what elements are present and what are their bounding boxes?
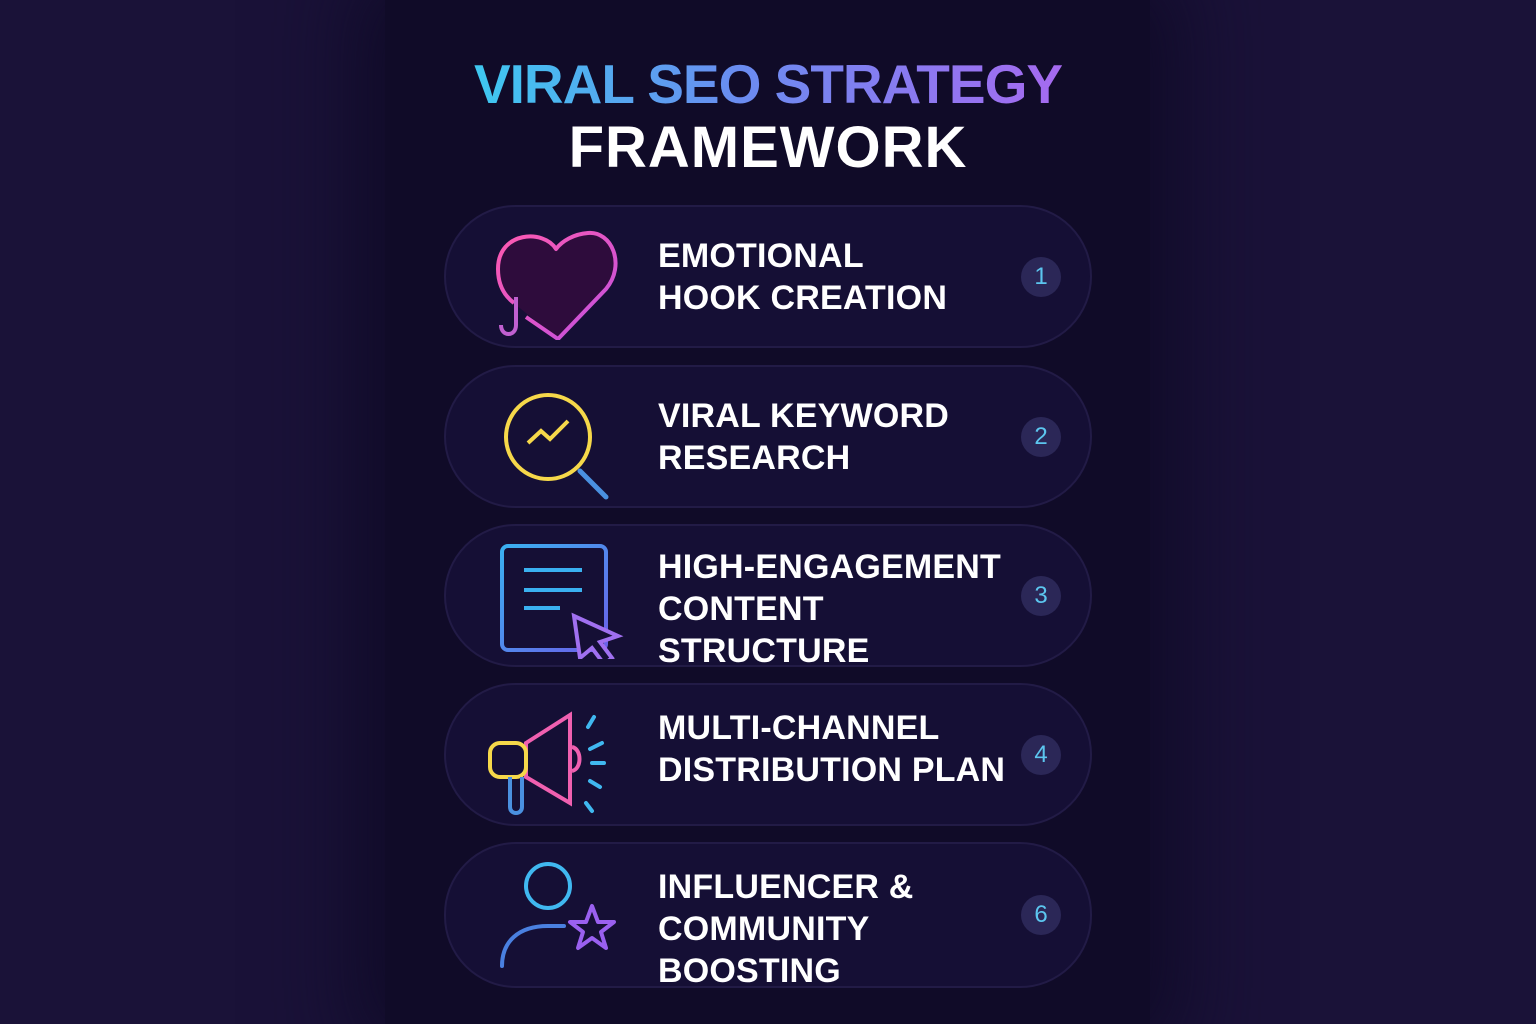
text: COMMUNITY xyxy=(658,910,869,948)
card 5 xyxy=(444,842,1092,988)
text xyxy=(658,237,947,317)
text: HIGH-ENGAGEMENT xyxy=(658,548,1001,586)
number badge: 6 xyxy=(1034,901,1048,928)
number badge: 2 xyxy=(1034,422,1048,450)
text xyxy=(658,868,914,990)
number badge: 3 xyxy=(1034,582,1048,608)
number badge xyxy=(1021,416,1061,456)
text xyxy=(658,709,1005,789)
text: EMOTIONAL xyxy=(658,237,864,275)
card 3 xyxy=(444,524,1092,667)
text: STRUCTURE xyxy=(658,632,869,670)
icon: megaphone xyxy=(488,711,606,815)
card 1 xyxy=(444,205,1092,348)
text: INFLUENCER & xyxy=(658,868,914,906)
icon: heart hook xyxy=(496,230,618,340)
icon: person star xyxy=(500,862,616,968)
number badge xyxy=(1021,256,1061,296)
title: FRAMEWORK xyxy=(569,115,967,180)
title xyxy=(474,53,1062,180)
text: RESEARCH xyxy=(658,439,850,477)
card 4 xyxy=(444,683,1092,826)
number badge: 1 xyxy=(1034,262,1048,290)
card 2 xyxy=(444,365,1092,508)
icon: magnifier xyxy=(504,393,608,500)
text: CONTENT xyxy=(658,590,824,628)
number badge xyxy=(1021,734,1061,774)
text: DISTRIBUTION PLAN xyxy=(658,751,1005,789)
number badge xyxy=(1021,576,1061,616)
title: VIRAL SEO STRATEGY xyxy=(474,53,1062,115)
number badge: 4 xyxy=(1034,740,1048,768)
number badge xyxy=(1021,895,1061,935)
text: HOOK CREATION xyxy=(658,279,947,317)
text: VIRAL KEYWORD xyxy=(658,397,949,435)
text xyxy=(658,548,1001,670)
text: MULTI-CHANNEL xyxy=(658,709,939,747)
text xyxy=(658,397,949,477)
text: BOOSTING xyxy=(658,952,841,990)
icon: document cursor xyxy=(500,544,624,659)
